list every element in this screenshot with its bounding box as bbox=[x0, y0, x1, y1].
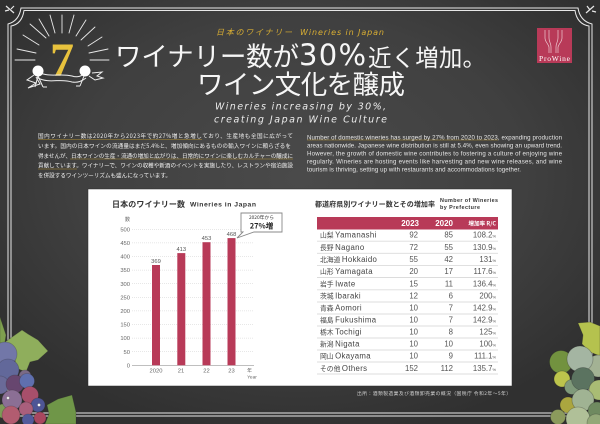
English body text: However, the growth of domestic wine contributes to fostering a culture of enjoying wine bbox=[307, 150, 563, 157]
row: Tochigi bbox=[320, 327, 496, 337]
y axis labels: 250 bbox=[120, 295, 130, 301]
row: Yamagata: 17 bbox=[444, 267, 453, 276]
row: Aomori: 青森 Aomori bbox=[320, 303, 362, 313]
row: Iwate: 15 bbox=[409, 279, 419, 288]
table heading: by Prefecture bbox=[440, 205, 480, 211]
main title: ワイン文化を醸成 bbox=[197, 63, 405, 102]
english title bbox=[214, 102, 387, 126]
table heading: Number of Wineries bbox=[440, 198, 498, 204]
row: Yamagata: 117.6% bbox=[474, 267, 496, 276]
row separators bbox=[317, 241, 498, 374]
y axis labels: 150 bbox=[120, 323, 130, 329]
row: Others: その他 Others bbox=[320, 363, 367, 373]
row: Yamanashi: 108.2% bbox=[473, 231, 496, 240]
row: Tochigi: 栃木 Tochigi bbox=[320, 327, 362, 337]
English body text: areas nationwide. Japanese wine distribution is still at 5.4%, even showing an upward trend. bbox=[307, 142, 562, 149]
chart heading: Wineries in Japan bbox=[190, 202, 256, 208]
row: Nigata: 10 bbox=[444, 340, 454, 349]
x axis labels: 年 bbox=[247, 367, 252, 374]
illustration: purple grapes bbox=[0, 317, 76, 424]
table: wineries by prefecture bbox=[315, 198, 498, 374]
english title: Wineries increasing by 30%, bbox=[215, 102, 386, 112]
row: Iwate: 136.4% bbox=[473, 279, 496, 288]
table header bbox=[317, 217, 498, 230]
y axis labels: 0 bbox=[127, 363, 130, 369]
subtitle: Japan's wineries: 日本のワイナリー bbox=[216, 27, 293, 38]
row: Yamanashi: 山梨 Yamanashi bbox=[320, 230, 377, 240]
row: Yamagata: 山形 Yamagata bbox=[320, 266, 373, 276]
English body text: regularly. Wineries are hosting events like harvesting and new wine releases, and wine bbox=[307, 158, 563, 165]
row: Iwate bbox=[320, 278, 496, 288]
bar values: 453 bbox=[202, 236, 211, 242]
table header: 2020 bbox=[435, 219, 454, 228]
bar values: 413 bbox=[176, 247, 186, 253]
row: Nagano bbox=[320, 242, 496, 252]
row: Ibaraki bbox=[320, 291, 496, 301]
y axis labels: 450 bbox=[120, 241, 130, 247]
chart heading: 日本のワイナリー数 bbox=[112, 199, 185, 210]
English body text: tourism is thriving, setting up with restaurants and accommodations together. bbox=[307, 166, 521, 173]
bars bbox=[152, 238, 236, 365]
bar values: 369 bbox=[151, 259, 161, 265]
row: Hokkaido: 42 bbox=[444, 255, 453, 264]
row: Aomori: 10 bbox=[409, 304, 419, 313]
row: Others: 152 bbox=[405, 364, 418, 373]
row: Hokkaido: 北海道 Hokkaido bbox=[320, 254, 378, 264]
row: Tochigi: 8 bbox=[449, 328, 453, 337]
row: Aomori: 142.9% bbox=[473, 304, 496, 313]
row: Ibaraki: 6 bbox=[449, 292, 453, 301]
emblem: 7th topic with rays bbox=[15, 15, 109, 88]
x axis labels bbox=[150, 367, 257, 380]
main title: 近く増加。 bbox=[368, 39, 486, 73]
row: Aomori: 7 bbox=[449, 304, 453, 313]
row: Nigata: 新潟 Nigata bbox=[320, 339, 360, 349]
row: Fukushima: 10 bbox=[409, 316, 419, 325]
row: Others bbox=[320, 363, 496, 373]
main title bbox=[115, 35, 486, 102]
row: Iwate: 岩手 Iwate bbox=[320, 278, 356, 288]
English body text bbox=[307, 134, 563, 173]
English body text: Number of domestic wineries has surged by 27% from 2020 to 2023, expanding production bbox=[307, 134, 562, 141]
table heading: 都道府県別ワイナリー数とその増加率 bbox=[315, 200, 435, 210]
row: Others: 135.7% bbox=[473, 364, 496, 373]
main title: ワイナリー数が bbox=[115, 35, 299, 74]
main title: 30% bbox=[299, 38, 366, 72]
grid lines bbox=[132, 229, 254, 352]
y axis labels bbox=[120, 216, 130, 369]
row: Nagano: 長野 Nagano bbox=[320, 242, 365, 252]
subtitle: Japan's wineries: Wineries in Japan bbox=[300, 28, 384, 37]
row: Ibaraki: 12 bbox=[409, 292, 418, 301]
row: Others: 112 bbox=[441, 364, 453, 373]
callout: 27% increase bbox=[237, 213, 282, 238]
bar values bbox=[151, 232, 236, 265]
y axis labels: 300 bbox=[120, 282, 130, 288]
illustration: green grapes bbox=[550, 322, 600, 424]
bar values: 468 bbox=[227, 232, 236, 238]
row: Fukushima: 142.9% bbox=[473, 316, 496, 325]
row: Fukushima bbox=[320, 315, 496, 325]
row: Aomori bbox=[320, 303, 496, 313]
y axis labels: 50 bbox=[124, 350, 130, 356]
Japanese body text: 国内ワイナリー数は2020年から2023年で約27%増と急増しており、生産地も全国に広がって bbox=[38, 132, 293, 140]
row: Hokkaido bbox=[320, 254, 496, 264]
row: Yamagata bbox=[320, 266, 496, 276]
english title: creating Japan Wine Culture bbox=[214, 114, 387, 126]
y axis labels: 400 bbox=[120, 255, 130, 261]
row: Tochigi: 125% bbox=[479, 328, 496, 337]
y axis labels: 350 bbox=[120, 268, 130, 274]
row: Fukushima: 7 bbox=[449, 316, 453, 325]
callout: 27% increase: 2020年から bbox=[249, 214, 274, 221]
row: Hokkaido: 131% bbox=[479, 255, 496, 264]
ProWine logo: ProWine bbox=[539, 54, 571, 63]
y axis labels: 100 bbox=[120, 336, 130, 342]
row: Yamanashi bbox=[320, 230, 496, 240]
row: Okayama: 111.1% bbox=[474, 352, 496, 361]
bar chart: wineries in Japan bbox=[112, 199, 282, 380]
y axis labels: 500 bbox=[120, 227, 130, 233]
row: Nagano: 130.9% bbox=[473, 243, 496, 252]
row: Okayama bbox=[320, 351, 496, 361]
Japanese body text bbox=[38, 132, 293, 179]
table header: 2023 bbox=[401, 219, 420, 228]
Japanese body text: います。国内の日本ワインの流通量はまだ5.4%と、増加傾向にあるものの輸入ワインに頼らざるを bbox=[38, 142, 291, 150]
y axis labels: 数 bbox=[125, 216, 130, 223]
y axis labels: 200 bbox=[120, 309, 130, 315]
table header: 増加率 R/C bbox=[468, 220, 496, 228]
row: Nigata bbox=[320, 339, 496, 349]
row: Ibaraki: 茨城 Ibaraki bbox=[320, 291, 361, 301]
Japanese body text: を併設するワインツーリズムも盛んになっています。 bbox=[38, 171, 171, 179]
x axis labels: Year bbox=[247, 374, 257, 380]
ribbon bbox=[27, 72, 103, 88]
row: Nagano: 72 bbox=[409, 243, 418, 252]
row: Okayama: 岡山 Okayama bbox=[320, 351, 371, 361]
row: Hokkaido: 55 bbox=[409, 255, 419, 264]
x axis labels: 21 bbox=[178, 368, 184, 374]
chart heading bbox=[112, 199, 256, 210]
x axis labels: 23 bbox=[228, 368, 235, 374]
row: Ibaraki: 200% bbox=[479, 292, 496, 301]
row: Nigata: 10 bbox=[409, 340, 419, 349]
row: Yamanashi: 92 bbox=[409, 231, 418, 240]
row: Nigata: 100% bbox=[479, 340, 496, 349]
x axis labels: 22 bbox=[203, 368, 210, 374]
Japanese body text: 貢献しています。ワイナリーで、ワインの収穫や新酒のイベントを実施したり、レストランや宿泊施設 bbox=[38, 162, 293, 170]
row: Yamagata: 20 bbox=[409, 267, 419, 276]
ProWine logo bbox=[537, 28, 572, 63]
x axis labels: 2020 bbox=[150, 368, 162, 374]
row: Iwate: 11 bbox=[445, 279, 453, 288]
Japanese body text: 得ませんが、日本ワインの生産・流通の増加と広がりは、日常的にワインに楽しむカルチャーの醸成に bbox=[38, 152, 293, 160]
row: Tochigi: 10 bbox=[409, 328, 419, 337]
white content panel bbox=[88, 189, 512, 386]
row: Fukushima: 福島 Fukushima bbox=[320, 315, 377, 325]
row: Nagano: 55 bbox=[444, 243, 454, 252]
row: Okayama: 9 bbox=[449, 352, 453, 361]
number seven: 7 bbox=[50, 34, 74, 87]
callout: 27% increase: 27%増 bbox=[250, 220, 274, 232]
row: Yamanashi: 85 bbox=[444, 231, 454, 240]
subtitle: Japan's wineries bbox=[216, 27, 384, 38]
table heading bbox=[315, 198, 498, 211]
row: Okayama: 10 bbox=[409, 352, 419, 361]
source note: 出所：酒類製造業及び酒類卸売業の概況（国税庁 令和2年～5年） bbox=[357, 390, 511, 397]
